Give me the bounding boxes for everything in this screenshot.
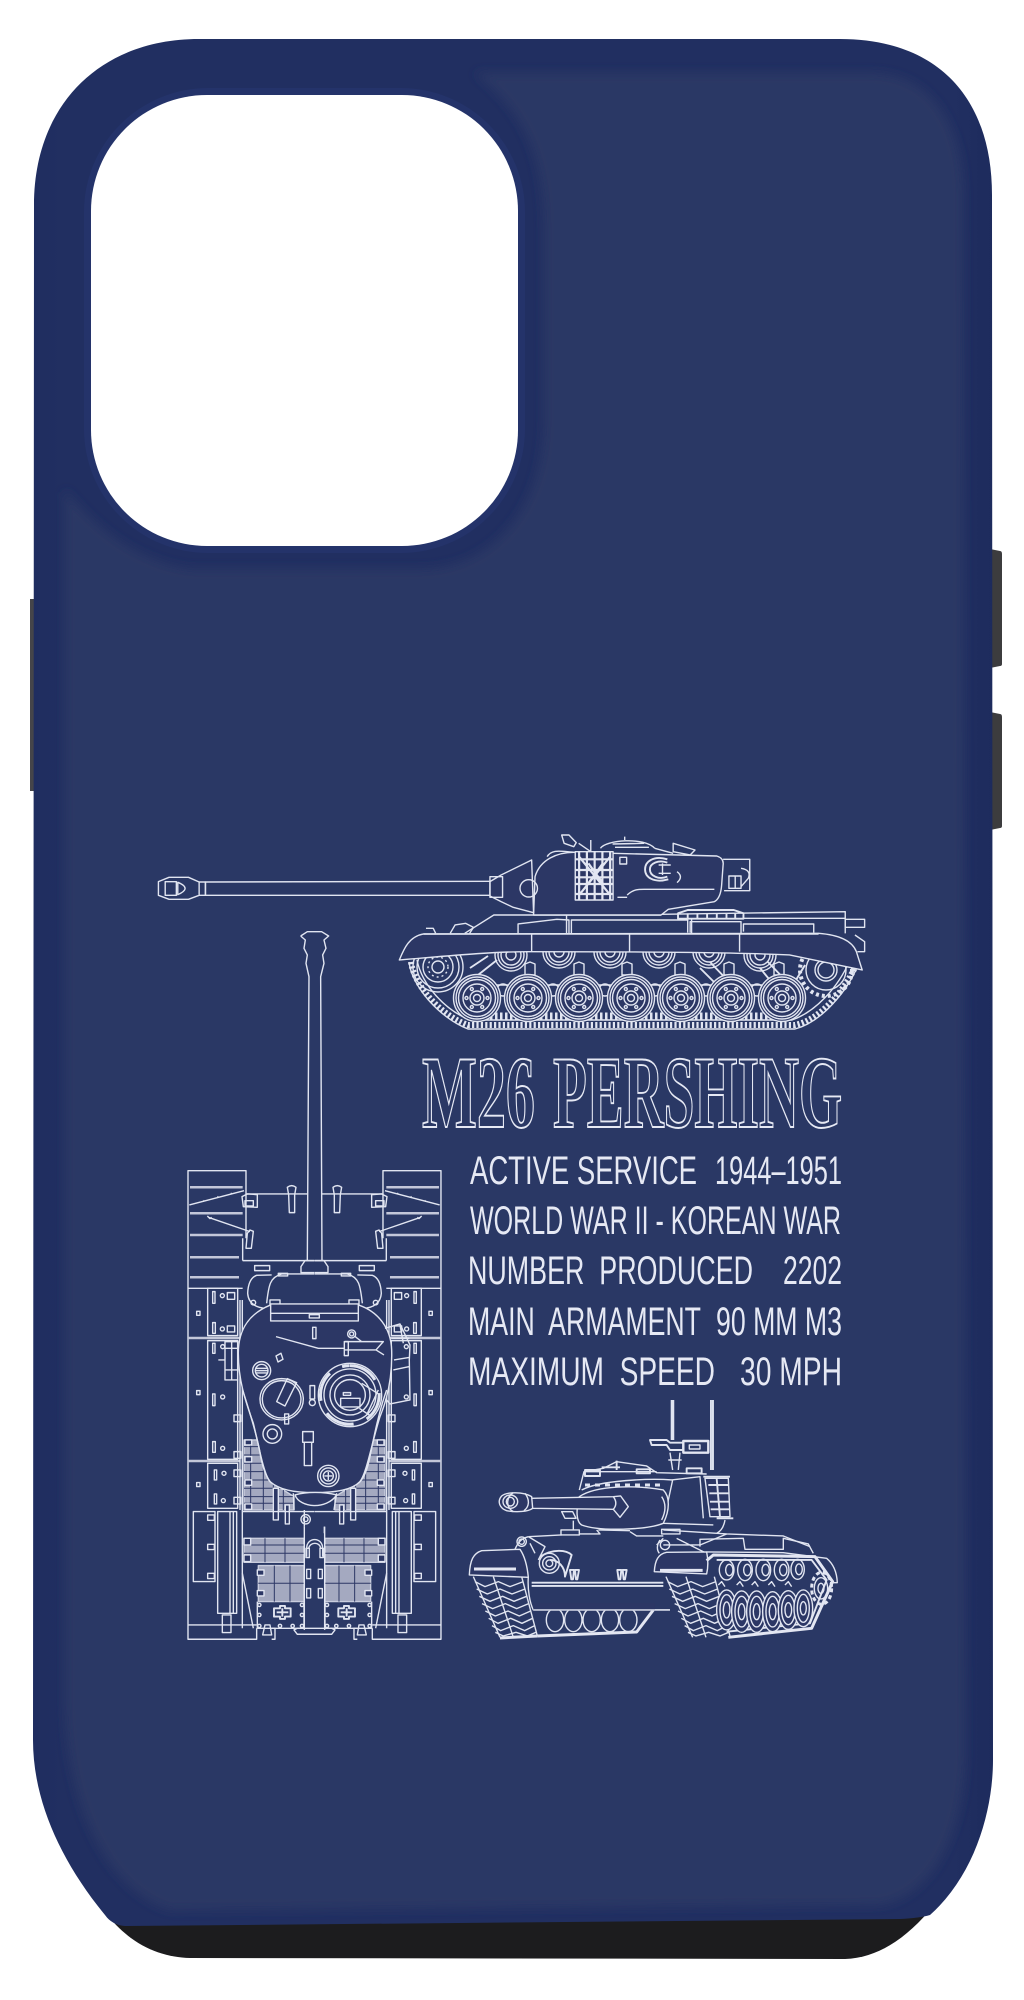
top view tank (188, 932, 441, 1639)
hull and turret (399, 835, 865, 970)
side button: right lower (990, 712, 1002, 830)
three-quarter view tank (469, 1400, 837, 1638)
antennas and machine gun (650, 1400, 713, 1470)
turret from above (218, 1304, 410, 1634)
spec: active service: 1944–1951 (715, 1149, 842, 1193)
gun barrel (158, 877, 490, 899)
side view tank (158, 835, 865, 1029)
turret (577, 1461, 733, 1533)
side button: left (30, 599, 36, 791)
title (422, 1034, 842, 1150)
title word: PERSHING: PERSHING (553, 1034, 842, 1150)
track and running gear (409, 936, 858, 1029)
spec: maximum speed: 30 MPH (740, 1350, 842, 1394)
front fenders (469, 1549, 837, 1583)
left half of top view (188, 1171, 314, 1639)
title word: M26: M26 (422, 1034, 535, 1150)
spec: main armament: MAIN ARMAMENT (468, 1300, 701, 1344)
spec: main armament: 90 MM M3 (716, 1300, 842, 1344)
gun front view (499, 1493, 628, 1518)
gun from above (301, 932, 329, 1261)
case bottom black lip (105, 1905, 934, 1959)
spec: active service: ACTIVE SERVICE (470, 1149, 697, 1193)
side button: right upper (990, 549, 1002, 668)
lower hull far wheels (533, 1603, 670, 1636)
spec: maximum speed: MAXIMUM SPEED (468, 1350, 715, 1394)
tracks and near wheels (473, 1555, 833, 1638)
camera cutout (84, 88, 525, 553)
spec: number produced: 2202 (783, 1249, 842, 1293)
hull (515, 1521, 813, 1610)
spec list (468, 1149, 842, 1394)
spec: number produced: NUMBER PRODUCED (468, 1249, 753, 1293)
right half of top view (315, 1171, 441, 1639)
